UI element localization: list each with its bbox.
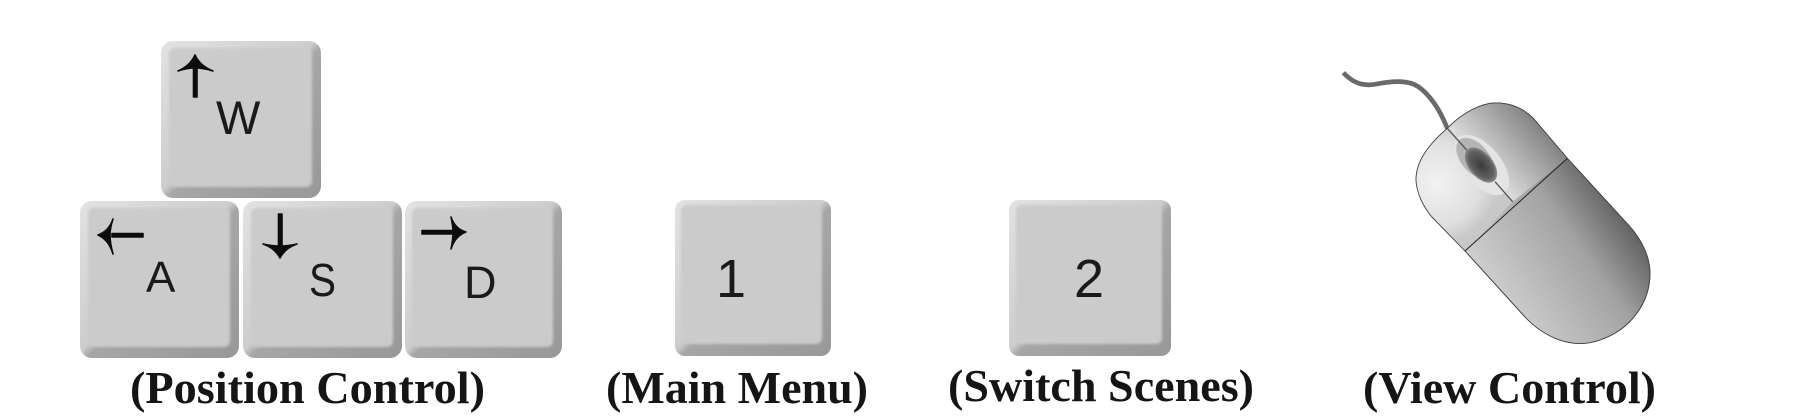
arrow down <box>263 214 297 258</box>
key D: D <box>464 257 496 308</box>
icon: computer mouse <box>1343 73 1650 344</box>
mouse seam lines <box>1447 128 1513 202</box>
label: main menu: (Main Menu) <box>606 362 868 413</box>
key S <box>243 201 402 358</box>
key 1: 1 <box>716 249 746 309</box>
key S: S <box>309 254 336 306</box>
key 2 <box>1009 200 1171 356</box>
mouse left button <box>1416 128 1513 251</box>
key W: W <box>216 91 261 144</box>
mouse body <box>1416 103 1650 344</box>
mouse top right button <box>1447 103 1567 202</box>
arrow left <box>98 219 143 254</box>
label: position control: (Position Control) <box>130 362 485 413</box>
key D <box>405 201 562 358</box>
label: switch scenes: (Switch Scenes) <box>948 360 1254 411</box>
key W <box>161 41 321 198</box>
key group: WASD position control <box>80 41 562 358</box>
arrow right <box>422 217 466 249</box>
key 1 <box>675 200 831 356</box>
mouse cable <box>1343 73 1447 128</box>
key 2: 2 <box>1074 249 1104 309</box>
label: view control: (View Control) <box>1363 362 1656 413</box>
key A: A <box>146 253 176 302</box>
key A <box>80 201 239 358</box>
scroll wheel well <box>1444 125 1520 205</box>
arrow up <box>178 55 213 97</box>
scroll wheel <box>1459 141 1503 189</box>
